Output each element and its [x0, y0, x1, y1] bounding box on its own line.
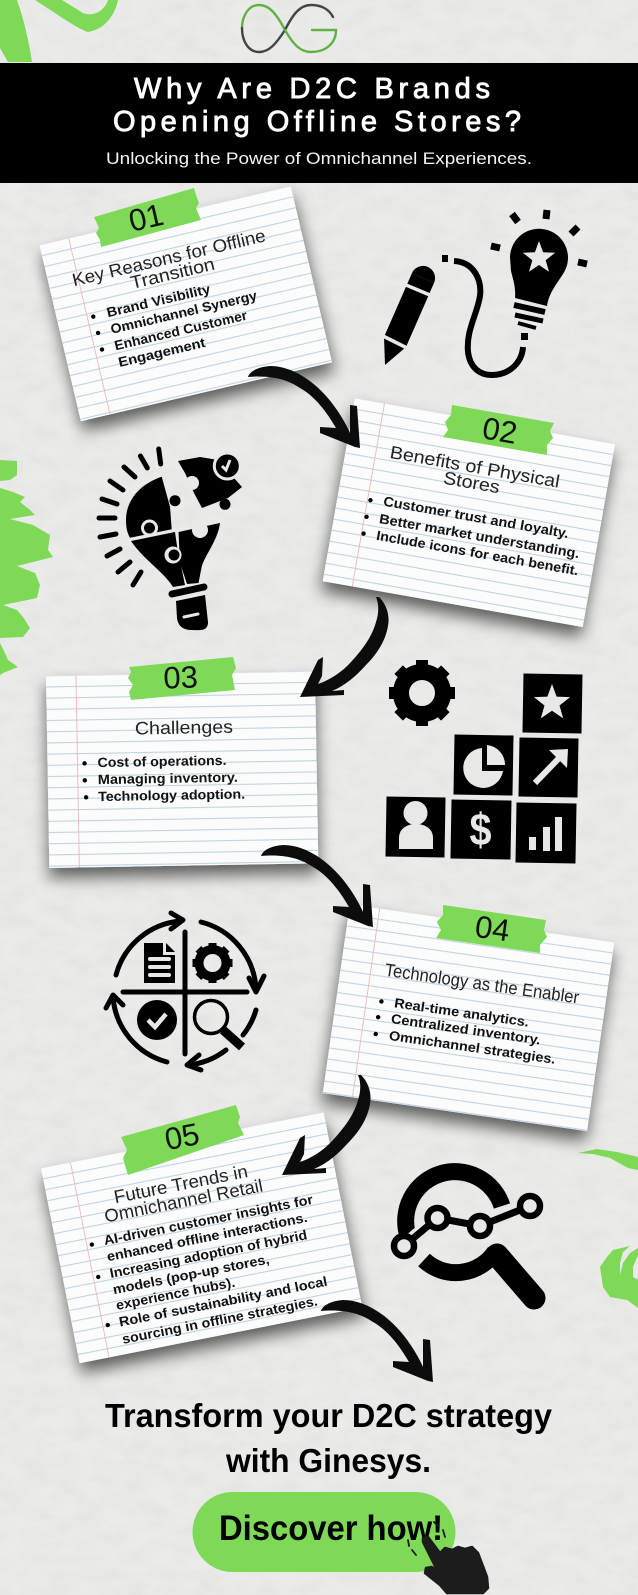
panel: 03 challenges	[46, 657, 318, 868]
panel: 05 future trends: experience hubs).	[115, 1275, 236, 1313]
icon: magnifier with trend line	[394, 1172, 540, 1298]
panel: 05 future trends: Omnichannel Retail	[103, 1175, 265, 1226]
panel: 01 key reasons: Transition	[128, 254, 217, 293]
panel: 05 future trends: sourcing in offline strategies.	[121, 1293, 319, 1347]
panel: 02 benefits: 02	[480, 410, 520, 451]
panel: 01 key reasons: 01	[125, 197, 167, 239]
panel: 01 key reasons: Brand Visibility	[105, 281, 212, 320]
panel: 03 challenges: Managing inventory.	[98, 770, 238, 787]
decorative green splash: top left	[0, 0, 118, 62]
panel: 05 future trends: AI-driven customer insights for	[102, 1192, 315, 1248]
decorative green brush: left	[0, 460, 53, 675]
icon: process cycle	[106, 913, 264, 1070]
arrow: 04 to 05	[282, 1075, 371, 1175]
title: Opening Offline Stores?	[113, 106, 521, 138]
panel: 01 key reasons: Engagement	[117, 335, 207, 370]
panel: 04 technology: Technology as the Enabler	[384, 960, 580, 1008]
panel: 05 future trends: Increasing adoption of hybrid	[108, 1227, 308, 1281]
panel: 05 future trends: enhanced offline interactions.	[106, 1210, 309, 1264]
icon: gear	[389, 660, 455, 726]
logo: Ginesys OG mark	[242, 5, 336, 52]
panel: 03 challenges: Technology adoption.	[98, 787, 245, 804]
panel: 05 future trends: models (pop-up stores,	[112, 1252, 270, 1297]
title: Why Are D2C Brands	[134, 73, 490, 105]
panel: 02 benefits	[323, 398, 615, 627]
panel: 01 key reasons: Omnichannel Synergy	[109, 288, 259, 337]
icon: business tiles: $	[470, 804, 492, 855]
header band	[0, 63, 638, 183]
panel: 02 benefits: Include icons for each benefit.	[375, 528, 580, 578]
arrow: 01 to 02	[248, 366, 360, 448]
arrow: 02 to 03	[300, 597, 389, 697]
panel: 05 future trends: Future Trends in	[112, 1161, 249, 1207]
panel: 04 technology: 04	[473, 909, 512, 948]
icon: pen and star light bulb	[381, 210, 587, 375]
panel: 02 benefits: Better market understanding.	[378, 511, 581, 561]
button: discover how	[192, 1492, 456, 1572]
call to action heading: with Ginesys.	[225, 1442, 431, 1479]
panel: 03 challenges: 03	[163, 659, 198, 696]
icon: puzzle light bulb	[99, 449, 242, 630]
panel: 01 key reasons: Key Reasons for Offline	[70, 225, 268, 290]
panel: 04 technology	[323, 904, 614, 1131]
panel: 04 technology: Real-time analytics.	[393, 995, 530, 1030]
panel: 04 technology: Omnichannel strategies.	[388, 1028, 557, 1067]
decorative green swoosh: right	[578, 1149, 638, 1308]
call to action heading: Transform your D2C strategy	[105, 1397, 553, 1434]
panel: 03 challenges: Cost of operations.	[97, 753, 227, 770]
icon: pointing hand	[408, 1522, 488, 1593]
arrow: 05 to call to action	[321, 1300, 433, 1382]
panel: 01 key reasons: Enhanced Customer	[113, 307, 249, 353]
title	[113, 73, 521, 138]
icon: business tiles	[385, 673, 583, 864]
arrow: 03 to 04	[261, 845, 373, 927]
panel: 02 benefits: Customer trust and loyalty.	[382, 494, 570, 541]
button: discover how: Discover how!	[219, 1509, 443, 1548]
panel: 05 future trends	[41, 1105, 362, 1363]
call to action heading	[105, 1397, 553, 1479]
panel: 03 challenges: Challenges	[135, 717, 233, 738]
panel: 04 technology: Centralized inventory.	[390, 1011, 542, 1047]
subtitle: Unlocking the Power of Omnichannel Experiences.	[106, 149, 532, 168]
panel: 05 future trends: Role of sustainability and local	[118, 1274, 329, 1330]
panel: 01 key reasons	[40, 186, 332, 421]
panel: 05 future trends: 05	[162, 1116, 202, 1157]
panel: 02 benefits: Stores	[442, 468, 501, 497]
panel: 02 benefits: Benefits of Physical	[388, 442, 561, 492]
